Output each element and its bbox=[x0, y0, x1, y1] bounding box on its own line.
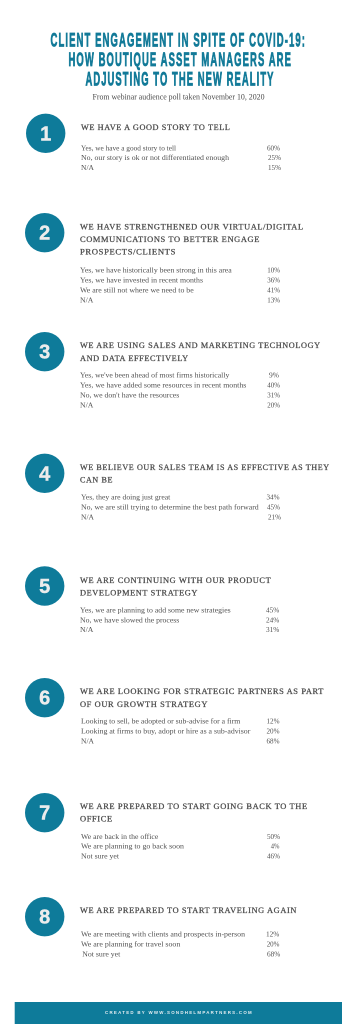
poll results 2: 41% bbox=[267, 285, 280, 294]
heading 3 bbox=[80, 341, 321, 363]
poll results 3: N/A bbox=[80, 400, 94, 409]
poll results 6: 12% bbox=[266, 717, 280, 726]
poll results 8: 20% bbox=[267, 939, 280, 948]
poll results 3: 40% bbox=[267, 381, 280, 390]
heading 4 bbox=[80, 463, 330, 484]
poll results 1: Yes, we have a good story to tell bbox=[81, 143, 177, 152]
icon: number 6 badge: 6 bbox=[39, 688, 50, 710]
icon: number 7 badge: 7 bbox=[39, 803, 50, 825]
poll results 8: 68% bbox=[267, 949, 281, 958]
poll results 2: Yes, we have invested in recent months bbox=[80, 275, 203, 284]
poll results 6: 68% bbox=[266, 736, 280, 745]
icon: number 2 badge bbox=[25, 213, 64, 252]
poll results 3 bbox=[80, 371, 280, 409]
heading 2: PROSPECTS/CLIENTS bbox=[80, 248, 176, 256]
panel: item 8 bbox=[25, 897, 297, 958]
poll results 6 bbox=[81, 717, 280, 745]
panel: item 2 bbox=[25, 213, 304, 304]
heading 5: WE ARE CONTINUING WITH OUR PRODUCT bbox=[80, 576, 271, 585]
icon: number 2 badge: 2 bbox=[39, 223, 50, 245]
heading 5: DEVELOPMENT STRATEGY bbox=[80, 588, 198, 598]
poll results 5 bbox=[80, 605, 280, 634]
poll results 8: We are planning for travel soon bbox=[81, 939, 180, 948]
heading 3: AND DATA EFFECTIVELY bbox=[80, 354, 189, 363]
poll results 1: N/A bbox=[81, 163, 94, 172]
poll results 4: 34% bbox=[266, 493, 280, 502]
poll results 2 bbox=[80, 266, 280, 304]
icon: number 4 badge bbox=[25, 454, 64, 493]
heading 4: CAN BE bbox=[80, 476, 113, 484]
poll results 2: 10% bbox=[267, 266, 280, 275]
poll results 4: 21% bbox=[268, 512, 281, 521]
poll results 8 bbox=[81, 930, 281, 958]
panel: item 1 bbox=[26, 114, 281, 172]
poll results 5: N/A bbox=[80, 625, 94, 634]
title bbox=[50, 31, 306, 90]
poll results 5: No, we have slowed the process bbox=[80, 615, 179, 624]
poll results 7 bbox=[81, 832, 280, 860]
icon: number 5 badge: 5 bbox=[39, 576, 50, 598]
heading 1: WE HAVE A GOOD STORY TO TELL bbox=[81, 123, 230, 132]
heading 2: WE HAVE STRENGTHENED OUR VIRTUAL/DIGITAL bbox=[80, 222, 304, 232]
poll results 1 bbox=[81, 143, 281, 172]
poll results 3: 9% bbox=[269, 371, 279, 380]
heading 7: OFFICE bbox=[80, 814, 113, 824]
poll results 3: 31% bbox=[267, 390, 280, 399]
poll results 3: Yes, we've been ahead of most firms historically bbox=[80, 371, 229, 380]
poll results 2: Yes, we have historically been strong in this area bbox=[80, 266, 232, 275]
footer credit: CREATED BY WWW.SONDHELMPARTNERS.COM bbox=[105, 1010, 252, 1015]
poll results 1: 15% bbox=[268, 163, 281, 172]
heading 4: WE BELIEVE OUR SALES TEAM IS AS EFFECTIVE AS THEY bbox=[80, 463, 330, 472]
poll results 6: 20% bbox=[266, 727, 280, 736]
heading 6: OF OUR GROWTH STRATEGY bbox=[80, 700, 208, 709]
subtitle: From webinar audience poll taken November 10, 2020 bbox=[92, 92, 264, 102]
poll results 7: We are back in the office bbox=[81, 832, 159, 841]
panel: item 5 bbox=[25, 566, 280, 634]
heading 7: WE ARE PREPARED TO START GOING BACK TO THE bbox=[80, 802, 308, 811]
poll results 7: 46% bbox=[267, 851, 280, 860]
icon: number 6 badge bbox=[25, 678, 64, 717]
icon: number 8 badge bbox=[25, 897, 64, 936]
icon: number 1 badge: 1 bbox=[40, 123, 51, 145]
poll results 8: Not sure yet bbox=[82, 949, 121, 958]
poll results 5: 31% bbox=[266, 625, 280, 634]
poll results 1: 60% bbox=[267, 143, 280, 152]
panel: item 3 bbox=[25, 332, 321, 409]
poll results 8: We are meeting with clients and prospects in-person bbox=[81, 930, 245, 939]
poll results 6: Looking at firms to buy, adopt or hire as a sub-advisor bbox=[81, 727, 251, 736]
heading 2: COMMUNICATIONS TO BETTER ENGAGE bbox=[80, 235, 260, 244]
heading 6 bbox=[80, 687, 324, 709]
poll results 2: We are still not where we need to be bbox=[80, 285, 194, 294]
poll results 7: We are planning to go back soon bbox=[81, 842, 184, 851]
poll results 5: 24% bbox=[266, 615, 280, 624]
poll results 7: 50% bbox=[267, 832, 280, 841]
poll results 5: Yes, we are planning to add some new strategies bbox=[80, 605, 231, 614]
icon: number 1 badge bbox=[26, 114, 65, 153]
poll results 3: Yes, we have added some resources in recent months bbox=[80, 381, 246, 390]
poll results 1: No, our story is ok or not differentiated enough bbox=[81, 153, 229, 162]
poll results 6: N/A bbox=[81, 736, 94, 745]
icon: number 8 badge: 8 bbox=[39, 907, 50, 929]
heading 2 bbox=[80, 222, 304, 256]
icon: number 3 badge bbox=[25, 332, 64, 371]
poll results 1: 25% bbox=[268, 153, 281, 162]
heading 3: WE ARE USING SALES AND MARKETING TECHNOLOGY bbox=[80, 341, 321, 350]
poll results 4: 45% bbox=[267, 502, 280, 511]
poll results 7: 4% bbox=[271, 842, 280, 851]
poll results 8: 12% bbox=[266, 930, 280, 939]
poll results 4 bbox=[81, 493, 281, 521]
heading 8: WE ARE PREPARED TO START TRAVELING AGAIN bbox=[80, 906, 297, 915]
poll results 4: N/A bbox=[81, 512, 94, 521]
footer banner bbox=[15, 1002, 342, 1024]
icon: number 5 badge bbox=[25, 566, 64, 606]
poll results 7: Not sure yet bbox=[81, 851, 120, 860]
icon: number 4 badge: 4 bbox=[39, 463, 51, 485]
icon: number 3 badge: 3 bbox=[39, 342, 50, 364]
panel: item 4 bbox=[25, 454, 330, 521]
poll results 2: 13% bbox=[267, 295, 280, 304]
poll results 4: Yes, they are doing just great bbox=[81, 493, 171, 502]
heading 7 bbox=[80, 802, 308, 824]
panel: item 6 bbox=[25, 678, 324, 745]
poll results 6: Looking to sell, be adopted or sub-advise for a firm bbox=[81, 717, 240, 726]
poll results 4: No, we are still trying to determine the best path forward bbox=[81, 502, 259, 511]
poll results 3: No, we don't have the resources bbox=[80, 390, 179, 399]
poll results 2: 36% bbox=[267, 275, 280, 284]
icon: number 7 badge bbox=[25, 793, 64, 832]
poll results 3: 20% bbox=[267, 400, 280, 409]
poll results 2: N/A bbox=[80, 295, 94, 304]
panel: item 7 bbox=[25, 793, 308, 860]
poll results 5: 45% bbox=[266, 605, 280, 614]
heading 5 bbox=[80, 576, 271, 598]
heading 6: WE ARE LOOKING FOR STRATEGIC PARTNERS AS PART bbox=[80, 687, 324, 696]
